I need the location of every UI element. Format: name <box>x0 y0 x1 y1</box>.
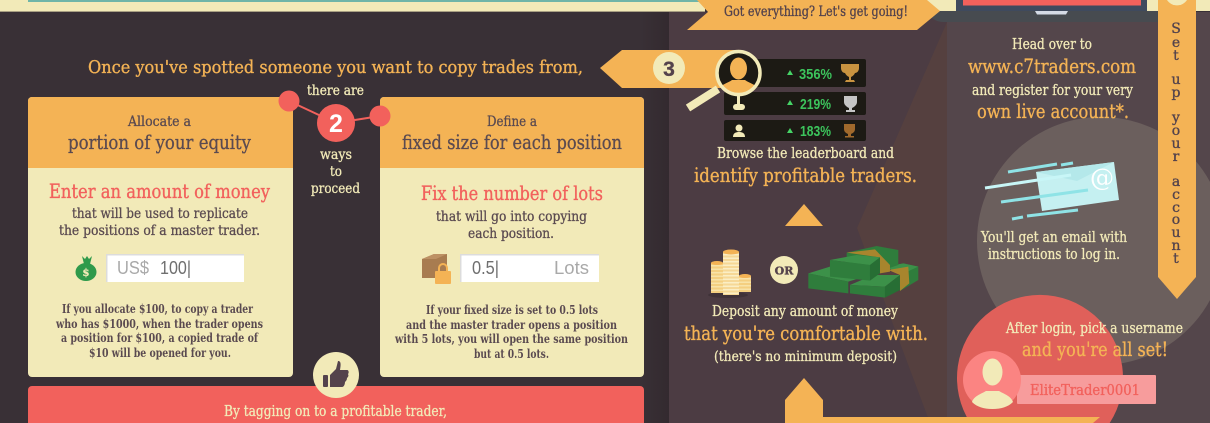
row 3 <box>724 120 866 141</box>
ribbon: set up your account: c <box>1172 187 1180 203</box>
example text: with 5 lots, you will open the same position <box>394 331 628 346</box>
connector: 2 ways to proceed: to <box>330 164 342 180</box>
panel: allocate portion of equity <box>28 97 293 377</box>
arrow: step 3 <box>600 50 735 88</box>
ribbon: set up your account <box>1158 0 1196 299</box>
example text: who has $1000, when the trader opens <box>55 316 263 331</box>
ribbon: set up your account: n <box>1171 238 1181 254</box>
ribbon: set up your account: c <box>1172 200 1180 216</box>
example text <box>394 302 628 361</box>
text: browse leaderboard: identify profitable traders. <box>694 164 917 187</box>
example text <box>55 301 263 360</box>
text: head over to: own live account*. <box>977 100 1129 123</box>
example text: but at 0.5 lots. <box>474 346 549 361</box>
text: email instructions <box>980 230 1127 263</box>
arrow: up triangle <box>785 204 823 226</box>
text: deposit <box>684 304 928 365</box>
panel: allocate portion of equity: portion of your equity <box>68 131 251 154</box>
panel: allocate portion of equity: that will be used to replicate <box>72 206 248 222</box>
ribbon: set up your account: o <box>1172 212 1180 228</box>
panel: conclusion banner <box>28 386 644 423</box>
icon: money bag: $ <box>83 268 90 279</box>
badge: or: OR <box>775 264 794 278</box>
panel: allocate portion of equity: Allocate a <box>127 114 191 130</box>
circle: username backdrop <box>957 295 1123 423</box>
icon: user avatar <box>963 351 1021 409</box>
laptop <box>925 0 1210 22</box>
text: email instructions: instructions to log in. <box>988 247 1120 263</box>
connector: 2 ways to proceed: there are <box>307 83 364 99</box>
text: deposit: (there's no minimum deposit) <box>714 349 897 365</box>
icon: magnifier over trader <box>688 52 760 108</box>
example text: and the master trader opens a position <box>406 317 617 332</box>
text: head over to: and register for your very <box>972 83 1134 99</box>
panel: fixed size for each position: Define a <box>487 114 537 130</box>
ribbon: set up your account: u <box>1171 136 1181 152</box>
top strip of the previous section <box>0 0 705 12</box>
ribbon: set up your account: t <box>1173 251 1179 267</box>
text: after login <box>1005 321 1183 361</box>
ribbon: set up your account: u <box>1171 72 1181 88</box>
panel: fixed size for each position <box>380 97 644 377</box>
leaderboard <box>724 59 866 141</box>
example text: a position for $100, a copied trade of <box>61 330 259 345</box>
icon: money bag <box>76 256 96 281</box>
panel: allocate portion of equity: the positions of a master trader. <box>59 223 260 239</box>
ribbon: set up your account: S <box>1171 21 1181 37</box>
arrow: step 3: 3 <box>663 58 675 81</box>
input: lots: Lots <box>554 258 589 278</box>
text: after login: and you're all set! <box>1022 338 1168 361</box>
panel: fixed size for each position: fixed size for each position <box>402 131 622 154</box>
text: head over to: www.c7traders.com <box>968 55 1136 78</box>
panel: fixed size for each position: Fix the number of lots <box>421 182 603 205</box>
input: amount: 100| <box>160 258 191 278</box>
badge: or <box>770 256 798 284</box>
panel: allocate portion of equity: Enter an amount of money <box>49 180 270 203</box>
text: deposit: Deposit any amount of money <box>712 304 899 320</box>
panel: step 3 background <box>640 12 947 423</box>
panel: conclusion banner: By tagging on to a profitable trader, <box>224 404 447 420</box>
row 2: 219% <box>800 96 831 113</box>
row 2 <box>724 92 866 115</box>
connector: 2 ways to proceed: 2 <box>329 110 343 138</box>
text: email instructions: You'll get an email with <box>980 230 1127 246</box>
ribbon: set up your account: t <box>1173 48 1179 64</box>
ribbon: set up your account: a <box>1172 174 1180 190</box>
example text: If your fixed size is set to 0.5 lots <box>426 302 598 317</box>
ribbon: set up your account: p <box>1172 85 1181 101</box>
text: deposit: that you're comfortable with. <box>684 322 928 345</box>
input: lots: 0.5| <box>472 258 499 278</box>
text: browse leaderboard: Browse the leaderboard and <box>717 146 894 162</box>
icon: coins <box>708 250 751 298</box>
input: amount <box>106 254 244 282</box>
banner: got everything: Got everything? Let's get going! <box>724 4 908 20</box>
example text: $10 will be opened for you. <box>89 345 231 360</box>
connector: 2 ways to proceed <box>278 83 390 197</box>
example text: If you allocate $100, to copy a trader <box>62 301 253 316</box>
connector: 2 ways to proceed: proceed <box>311 181 360 197</box>
icon: stacks of cash <box>808 246 918 298</box>
text: head over to: Head over to <box>1012 37 1092 53</box>
banner: got everything <box>687 0 940 30</box>
icon: flying email <box>985 162 1119 219</box>
ribbon: set up your account: u <box>1171 225 1181 241</box>
ribbon: set up your account: r <box>1173 149 1180 165</box>
input: lots <box>460 254 599 282</box>
icon: thumbs up <box>313 352 359 398</box>
icon: flying email: @ <box>1090 164 1114 192</box>
icon: locked box <box>422 254 451 284</box>
row 1 <box>724 59 866 87</box>
panel: fixed size for each position: each position. <box>468 226 554 242</box>
ribbon: set up your account: y <box>1171 110 1180 126</box>
input: amount: US$ <box>117 258 149 278</box>
heading: once you've spotted: Once you've spotted someone you want to copy trades from, <box>88 57 583 78</box>
text: after login: After login, pick a username <box>1005 321 1183 337</box>
row 3: 183% <box>800 123 831 140</box>
panel: step 4 background <box>947 12 1210 423</box>
connector: 2 ways to proceed: ways <box>320 147 352 163</box>
ribbon: set up your account: e <box>1172 35 1180 51</box>
ribbon: set up your account: o <box>1172 123 1180 139</box>
panel: fixed size for each position: that will go into copying <box>436 209 587 225</box>
text: head over to <box>968 37 1136 123</box>
username field <box>1017 375 1156 404</box>
row 1: 356% <box>799 66 832 83</box>
text: browse leaderboard <box>694 146 917 187</box>
circle: email backdrop <box>977 117 1210 365</box>
username field: EliteTrader0001 <box>1030 383 1140 399</box>
arrow: bottom path up <box>785 378 1100 423</box>
